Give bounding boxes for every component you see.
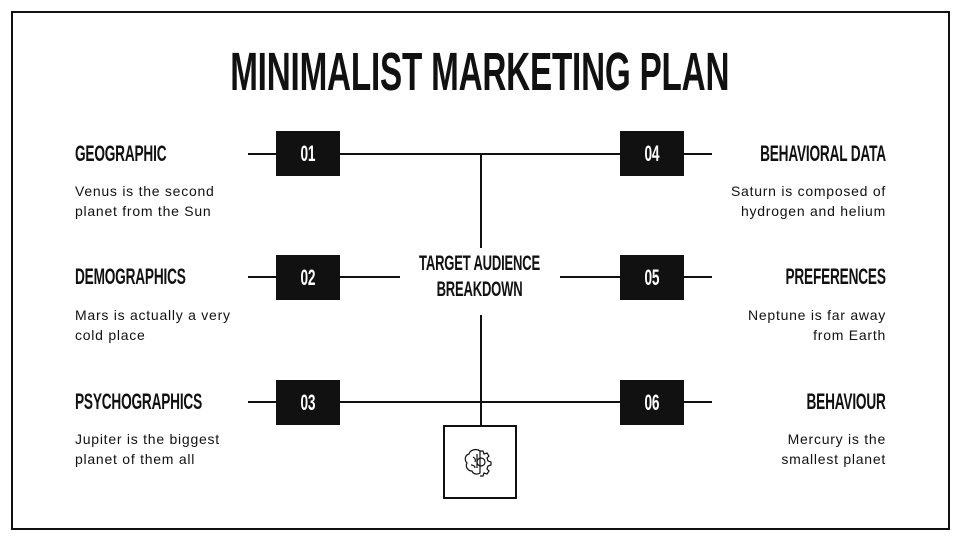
text: planet of them all [75, 451, 195, 467]
text: PREFERENCES [786, 264, 886, 289]
text: GEOGRAPHIC [75, 141, 166, 166]
text: cold place [75, 327, 146, 343]
center label: TARGET AUDIENCE [420, 252, 540, 275]
text: Jupiter is the biggest [75, 431, 220, 447]
text: 04 [645, 141, 659, 166]
center label [419, 252, 540, 301]
text: Mercury is the [788, 431, 886, 447]
text: BEHAVIORAL DATA [760, 141, 886, 166]
icon: brain gear [443, 425, 517, 499]
text: Venus is the second [75, 183, 215, 199]
connector lines [248, 153, 712, 425]
center label: BREAKDOWN [437, 278, 523, 301]
text: Saturn is composed of [731, 183, 886, 199]
text: PSYCHOGRAPHICS [75, 389, 202, 414]
text: Mars is actually a very [75, 307, 231, 323]
text: BEHAVIOUR [807, 389, 886, 414]
right items [731, 141, 886, 467]
text: 06 [645, 390, 659, 415]
text: planet from the Sun [75, 203, 211, 219]
text: Neptune is far away [748, 307, 886, 323]
text: 03 [301, 390, 315, 415]
left items [75, 141, 231, 467]
text: 05 [645, 265, 659, 290]
number boxes [276, 131, 684, 425]
text: hydrogen and helium [741, 203, 886, 219]
text: smallest planet [781, 451, 886, 467]
text: from Earth [813, 327, 886, 343]
text: 02 [301, 265, 315, 290]
title: MINIMALIST MARKETING PLAN [230, 42, 730, 102]
text: DEMOGRAPHICS [75, 264, 186, 289]
text: 01 [301, 141, 315, 166]
